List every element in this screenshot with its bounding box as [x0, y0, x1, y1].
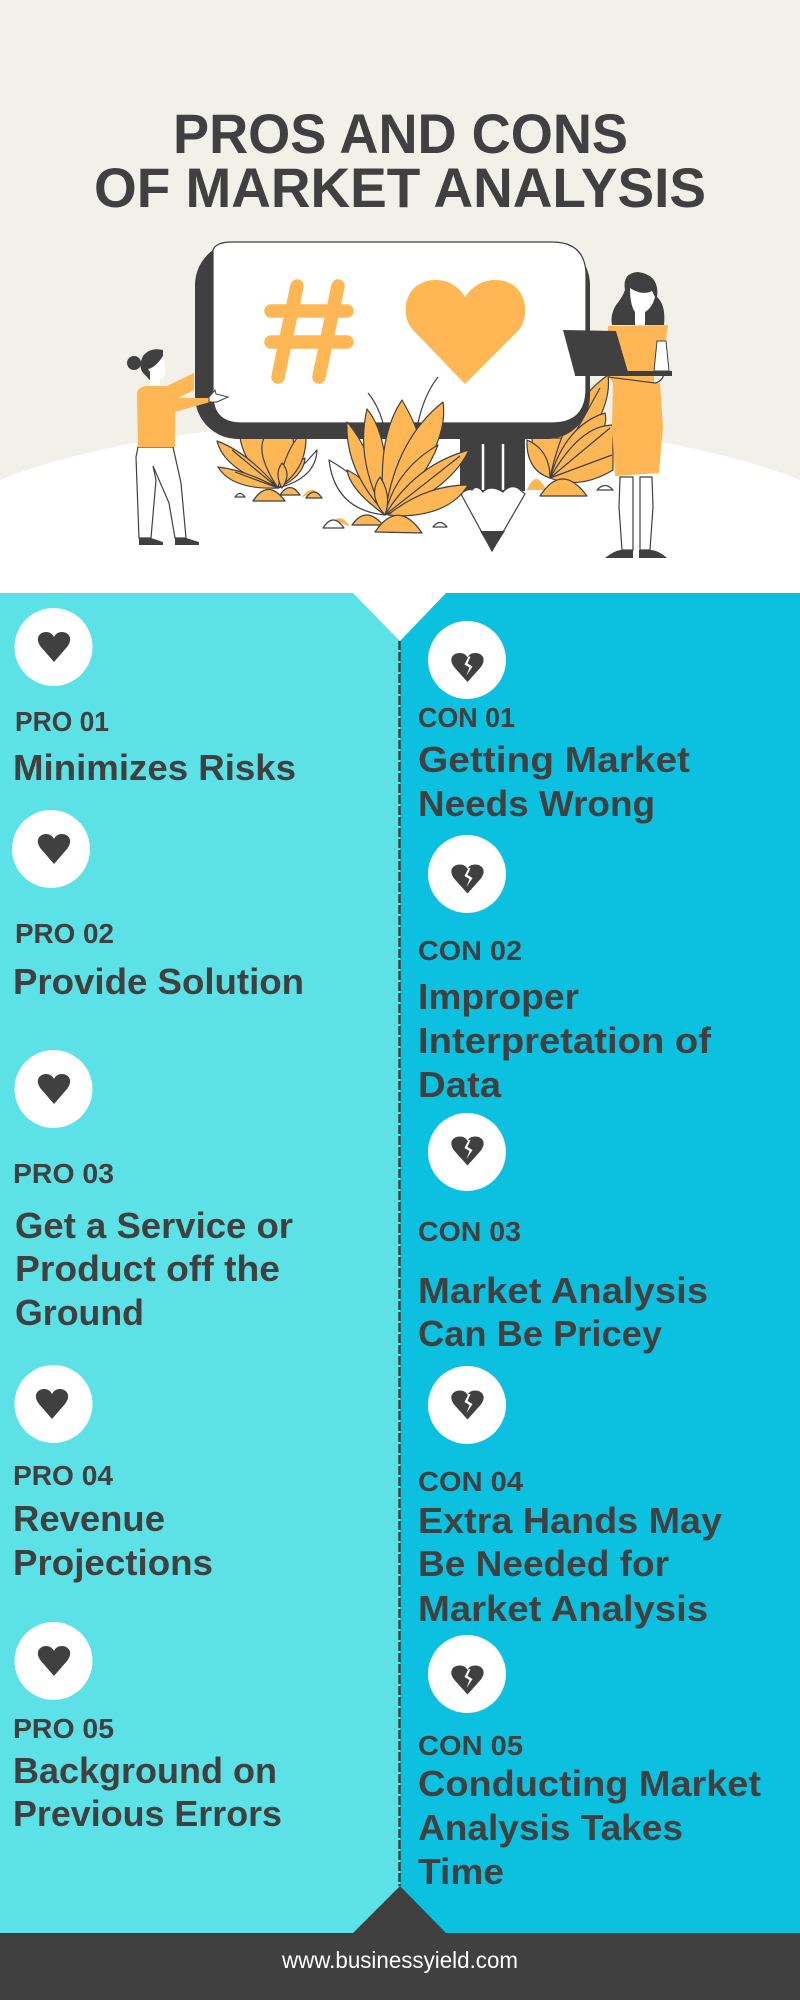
heading: Revenue [13, 1498, 165, 1539]
label: CON 03 [418, 1216, 521, 1247]
icon: broken heart [428, 1113, 506, 1191]
icon: hash [271, 286, 347, 377]
illustration: people with social media board [127, 242, 672, 558]
pro 02 [12, 810, 304, 1002]
pro 01 [13, 608, 296, 788]
label: PRO 05 [13, 1713, 114, 1744]
monitor board [195, 242, 590, 439]
icon: center plant [323, 377, 469, 533]
pro 05 [13, 1622, 282, 1834]
heading: Provide Solution [13, 961, 304, 1002]
heading: Time [418, 1851, 504, 1892]
con 02 [418, 835, 712, 1105]
icon: left plant [217, 438, 322, 501]
con 01 [418, 621, 690, 824]
heading [418, 1500, 722, 1629]
footer url: www.businessyield.com [281, 1947, 518, 1973]
figure: woman with laptop at right [563, 272, 672, 558]
heading [15, 1205, 293, 1333]
icon: big heart [406, 280, 525, 384]
pro 03 [13, 1050, 293, 1333]
footer bar [0, 1886, 800, 2000]
heading [13, 1498, 213, 1583]
con 04 [418, 1366, 722, 1629]
heading: Extra Hands May [418, 1500, 722, 1541]
label: CON 04 [418, 1466, 523, 1497]
heading: Needs Wrong [418, 783, 655, 824]
icon: broken heart [428, 1635, 506, 1713]
heading: Get a Service or [15, 1205, 293, 1246]
label: PRO 02 [15, 918, 114, 949]
icon: broken heart [428, 1366, 506, 1444]
panel: cons background [400, 593, 800, 1933]
notch at top [352, 592, 447, 641]
center dashed divider [398, 641, 401, 1886]
con 05 [418, 1635, 761, 1892]
label: CON 05 [418, 1730, 523, 1761]
icon: heart [14, 1622, 92, 1700]
heading [418, 1270, 708, 1354]
heading: Improper [418, 976, 579, 1017]
heading: Be Needed for [418, 1543, 669, 1584]
label: CON 01 [418, 702, 515, 733]
icon: heart [12, 810, 90, 888]
panel: pros background [0, 593, 400, 1935]
heading: Analysis Takes [418, 1807, 683, 1848]
heading: Market Analysis [418, 1270, 708, 1311]
header background [0, 0, 800, 720]
icon: right plant [527, 375, 613, 496]
figure: woman at left [127, 349, 228, 545]
label: PRO 03 [13, 1158, 114, 1189]
label: CON 02 [418, 935, 522, 966]
heading: Interpretation of [418, 1020, 712, 1061]
icon: heart [14, 1365, 92, 1443]
heading [13, 1750, 282, 1834]
heading [418, 739, 690, 824]
heading [418, 1763, 761, 1892]
heading: Product off the [15, 1248, 280, 1289]
pro 04 [13, 1365, 213, 1583]
heading: Data [418, 1064, 502, 1105]
icon: heart [14, 608, 92, 686]
heading: Minimizes Risks [13, 747, 296, 788]
icon: pencil [460, 439, 525, 551]
title: OF MARKET ANALYSIS [94, 156, 706, 219]
icon: broken heart [428, 621, 506, 699]
icon: heart [14, 1050, 92, 1128]
heading: Previous Errors [13, 1793, 282, 1834]
title [94, 102, 706, 219]
icon: broken heart [428, 835, 506, 913]
label: PRO 01 [15, 706, 109, 737]
heading: Background on [13, 1750, 277, 1791]
heading: Projections [13, 1542, 213, 1583]
heading: Can Be Pricey [418, 1313, 662, 1354]
heading [418, 976, 712, 1105]
con 03 [418, 1113, 708, 1354]
heading: Market Analysis [418, 1588, 708, 1629]
heading: Ground [15, 1292, 144, 1333]
title: PROS AND CONS [173, 102, 628, 165]
heading: Getting Market [418, 739, 690, 780]
heading: Conducting Market [418, 1763, 761, 1804]
label: PRO 04 [13, 1460, 113, 1491]
